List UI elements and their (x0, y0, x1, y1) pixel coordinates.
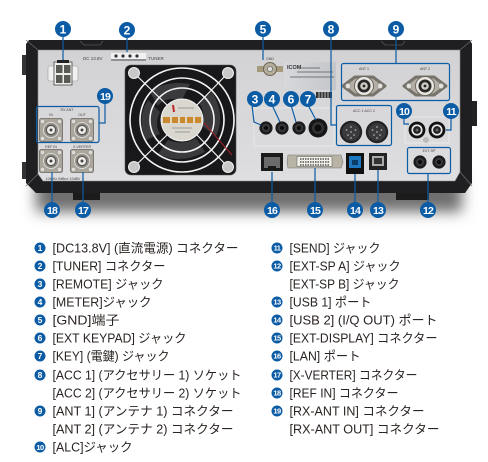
port: USB 1 (369, 153, 387, 170)
cooling fan (125, 65, 236, 175)
item 8 (34, 368, 242, 400)
badge 2: 2 (124, 24, 131, 38)
item 3: [REMOTE] ジャック (52, 278, 164, 292)
item 9: [ANT 2] (アンテナ 2) コネクター (52, 422, 234, 436)
callout number badges (44, 21, 459, 218)
jacks: ALC, SEND (405, 117, 449, 143)
item 17: [X-VERTER] コネクター (290, 368, 418, 382)
item 13: [USB 1] ポート (290, 296, 372, 310)
rating label (284, 62, 336, 98)
jack group: REMOTE, METER, EXT KEYPAD, KEY (254, 108, 334, 146)
item 3: 3 (38, 279, 43, 289)
badge 11: 11 (446, 106, 457, 118)
badge 13: 13 (373, 205, 384, 217)
badge 16 (264, 202, 280, 218)
badge 19: 19 (100, 91, 111, 103)
connector: GND terminal: GND (266, 57, 274, 61)
badge 1 (55, 21, 71, 37)
item 15: 15 (273, 334, 281, 343)
badge 14 (347, 202, 363, 218)
item 19: 19 (273, 407, 281, 416)
item 18: 18 (273, 389, 281, 398)
sockets: ACC 1, ACC 2: ACC 1 ACC 2 (353, 109, 375, 113)
badge 17 (75, 202, 91, 218)
connector: RX-ANT, REF IN, X-VERTER: 10MHz 0dBm/-10dBV (46, 177, 81, 181)
badge 9: 9 (393, 22, 400, 36)
item 12 (272, 260, 400, 292)
legend: right column (272, 242, 440, 436)
item 12: [EXT-SP B] ジャック (290, 278, 400, 292)
connector: GND terminal (257, 57, 283, 76)
badge 8 (323, 21, 339, 37)
chassis (22, 40, 477, 200)
badge 16: 16 (267, 205, 278, 217)
badge 3: 3 (252, 92, 259, 106)
item 7: [KEY] (電鍵) ジャック (52, 350, 170, 364)
connectors: ANT 1, ANT 2: ANT 1 (359, 67, 369, 71)
item 1: [DC13.8V] (直流電源) コネクター (52, 240, 238, 256)
port: LAN (261, 153, 283, 171)
connector: TUNER (111, 53, 164, 61)
badge 10 (396, 103, 412, 119)
badge 17: 17 (78, 205, 89, 217)
badge 6: 6 (288, 92, 295, 106)
item 11: [SEND] ジャック (290, 242, 380, 256)
badge 10: 10 (399, 106, 410, 118)
item 2: [TUNER] コネクター (52, 260, 166, 274)
badge 11 (443, 103, 459, 119)
item 16: [LAN] ポート (290, 350, 360, 364)
item 4: [METER]ジャック (52, 296, 152, 310)
connector: RX-ANT, REF IN, X-VERTER: X-VERTER (73, 145, 91, 149)
jacks: EXT-SP A, EXT-SP B (413, 149, 446, 169)
device rear-panel illustration (22, 21, 477, 218)
item 5: 5 (38, 315, 43, 325)
connector: RX-ANT, REF IN, X-VERTER: REF IN (45, 145, 57, 149)
item 17: 17 (273, 371, 281, 380)
badge 15 (307, 202, 323, 218)
rating label: ICOM (287, 65, 302, 71)
drop shadow (36, 178, 462, 212)
item 1: 1 (38, 243, 43, 253)
connector: DC13.8V: DC 13.8V (83, 56, 103, 61)
item 8: [ACC 1] (アクセサリー 1) ソケット (52, 368, 242, 382)
item 9: [ANT 1] (アンテナ 1) コネクター (52, 404, 234, 418)
legend: left column (34, 240, 242, 454)
badge 18: 18 (47, 205, 58, 217)
item 19: [RX-ANT IN] コネクター (290, 404, 424, 418)
item 5: [GND]端子 (52, 314, 120, 328)
badge 1: 1 (60, 22, 67, 36)
item 2: 2 (38, 261, 43, 271)
badge 15: 15 (310, 205, 321, 217)
badge 4: 4 (269, 92, 276, 106)
connector: RX-ANT, REF IN, X-VERTER: RX ANT (61, 108, 74, 112)
item 14: 14 (273, 316, 282, 325)
badge 6 (283, 91, 299, 107)
connector: EXT-DISPLAY (287, 155, 343, 168)
item 7: 7 (38, 351, 43, 361)
item 8: [ACC 2] (アクセサリー 2) ソケット (52, 386, 242, 400)
item 19: [RX-ANT OUT] コネクター (290, 422, 440, 436)
badge 7: 7 (305, 92, 312, 106)
badge 5 (255, 21, 271, 37)
item 12: [EXT-SP A] ジャック (290, 260, 400, 274)
item 11: 11 (274, 244, 281, 253)
callout group boxes and leader lines (36, 36, 451, 204)
item 8: 8 (38, 370, 43, 380)
connector: DC13.8V (48, 56, 103, 85)
item 10: [ALC]ジャック (52, 440, 132, 454)
badge 18 (44, 202, 60, 218)
item 14: [USB 2] (I/Q OUT) ポート (290, 314, 438, 328)
sockets: ACC 1, ACC 2 (340, 109, 388, 143)
item 4: 4 (38, 297, 43, 307)
badge 12 (420, 202, 436, 218)
connector: TUNER: TUNER (148, 56, 164, 61)
item 19 (272, 404, 440, 436)
item 13: 13 (273, 298, 281, 307)
badge 2 (119, 22, 135, 38)
connectors: ANT 1, ANT 2 (343, 67, 446, 96)
item 6: [EXT KEYPAD] ジャック (52, 332, 186, 346)
badge 13 (370, 202, 386, 218)
item 6: 6 (38, 333, 43, 343)
badge 19 (97, 88, 113, 104)
connectors: ANT 1, ANT 2: ANT 2 (420, 67, 430, 71)
badge 3 (247, 91, 263, 107)
item 9: 9 (38, 406, 43, 416)
item 9 (34, 404, 234, 436)
badge 9 (388, 21, 404, 37)
badge 7 (300, 91, 316, 107)
connector: RX-ANT, REF IN, X-VERTER: IN (49, 113, 53, 117)
jacks: EXT-SP A, EXT-SP B: EXT-SP (423, 149, 436, 153)
item 18: [REF IN] コネクター (290, 386, 398, 400)
connector: RX-ANT, REF IN, X-VERTER: OUT (78, 113, 87, 117)
badge 5: 5 (260, 22, 267, 36)
badge 12: 12 (423, 205, 434, 217)
item 15: [EXT-DISPLAY] コネクター (290, 332, 438, 346)
item 10: 10 (36, 443, 44, 452)
badge 8: 8 (328, 22, 335, 36)
badge 14: 14 (350, 205, 361, 217)
connector: RX-ANT, REF IN, X-VERTER (40, 108, 94, 181)
item 12: 12 (273, 262, 281, 271)
port: USB 2 (346, 153, 364, 174)
badge 4 (264, 91, 280, 107)
item 16: 16 (273, 352, 281, 361)
